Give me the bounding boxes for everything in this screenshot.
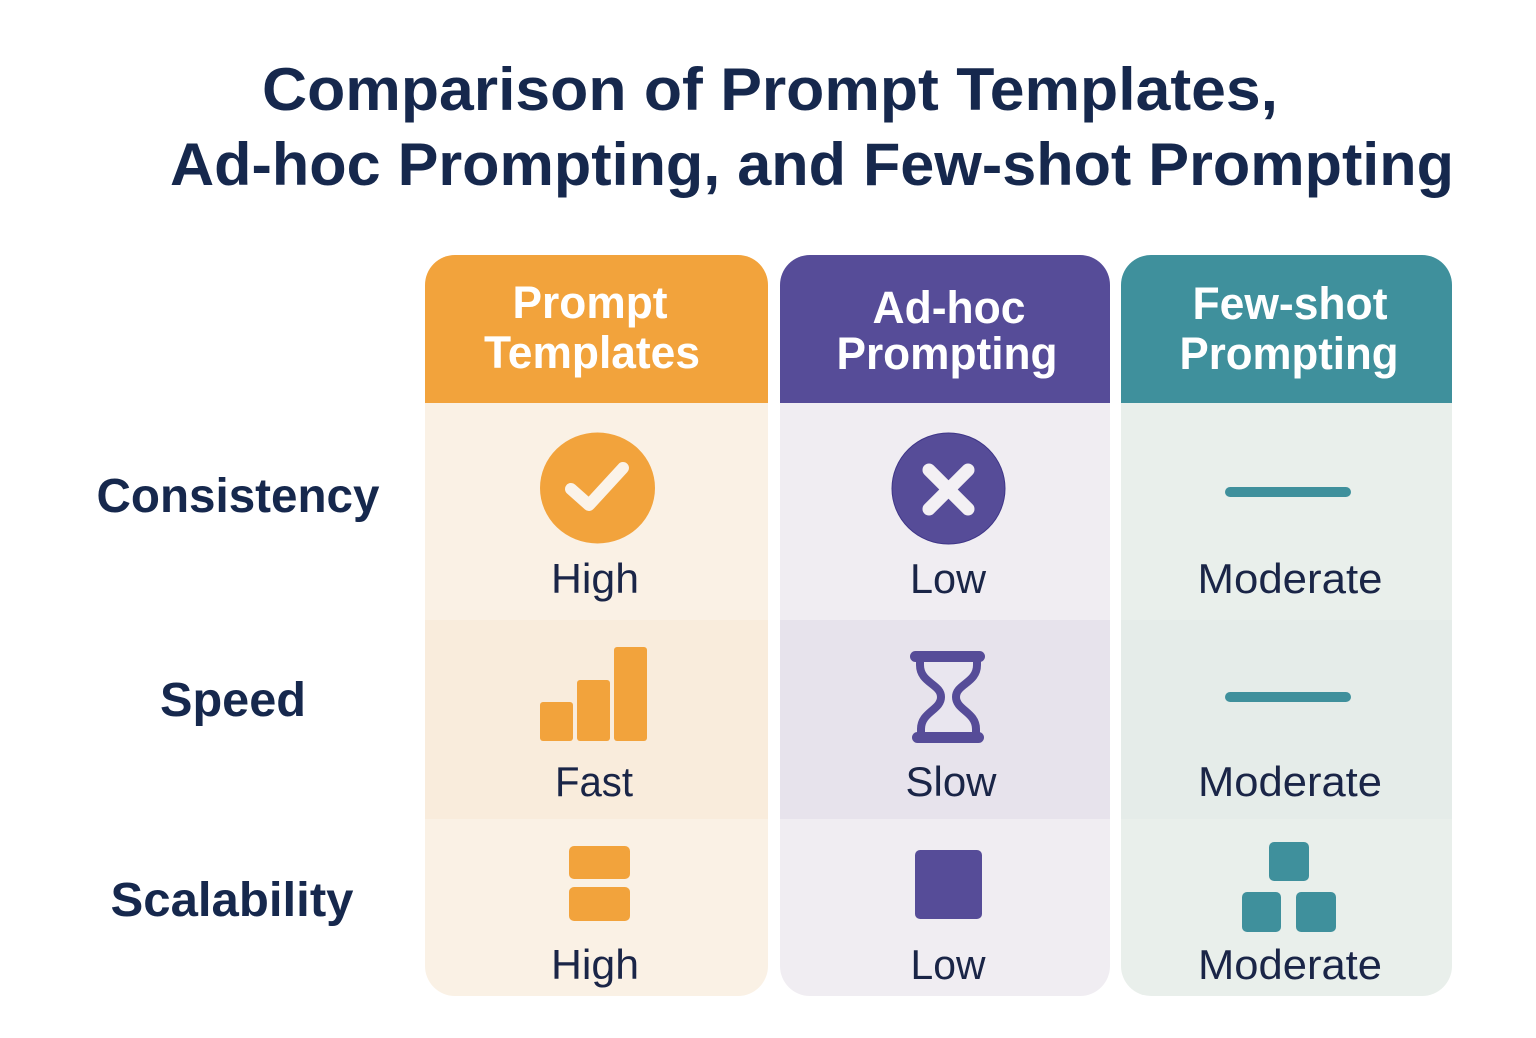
icon: x circle: [892, 433, 1005, 544]
value: high consistency: High: [551, 555, 639, 602]
row label: scalability: Scalability: [110, 874, 354, 927]
value: low consistency: Low: [910, 555, 987, 602]
icon: single square: [915, 850, 982, 919]
title: [170, 56, 1454, 198]
column heading: ad-hoc prompting: [836, 282, 1058, 379]
panel: prompt templates column: [425, 255, 768, 996]
row label: consistency: Consistency: [96, 470, 380, 523]
panel: ad-hoc prompting column: [780, 255, 1110, 996]
panel: few-shot prompting column: [1121, 255, 1452, 996]
value: fast speed: Fast: [555, 758, 633, 805]
column heading: prompt templates: [484, 277, 700, 378]
column heading: prompt templates: Templates: [484, 327, 700, 378]
row label: speed: Speed: [160, 674, 306, 727]
column heading: few-shot prompting: Prompting: [1180, 328, 1398, 379]
icon: dash moderate consistency: [1225, 487, 1351, 497]
column heading: ad-hoc prompting: Prompting: [836, 328, 1058, 379]
row labels: [96, 470, 380, 927]
title: Comparison of Prompt Templates,: [262, 56, 1278, 123]
value: slow speed: Slow: [906, 758, 997, 805]
value: moderate speed: Moderate: [1198, 758, 1382, 805]
column heading: ad-hoc prompting: Ad-hoc: [872, 282, 1026, 333]
column heading: few-shot prompting: Few-shot: [1192, 278, 1388, 329]
icon: dash moderate speed: [1225, 692, 1351, 702]
icon: three squares: [1242, 842, 1336, 932]
column heading: few-shot prompting: [1180, 278, 1398, 379]
icon: check circle: [540, 432, 655, 544]
icon: stacked blocks: [569, 846, 630, 921]
value: low scalability: Low: [910, 941, 986, 988]
value: moderate scalability: Moderate: [1198, 941, 1382, 988]
column heading: prompt templates: Prompt: [512, 277, 668, 328]
value: moderate consistency: Moderate: [1198, 555, 1382, 602]
cell values: [551, 555, 1382, 988]
icon: rising bars: [540, 647, 647, 741]
value: high scalability: High: [551, 941, 639, 988]
icon: hourglass: [910, 651, 985, 743]
title: Ad-hoc Prompting, and Few-shot Prompting: [170, 131, 1454, 198]
